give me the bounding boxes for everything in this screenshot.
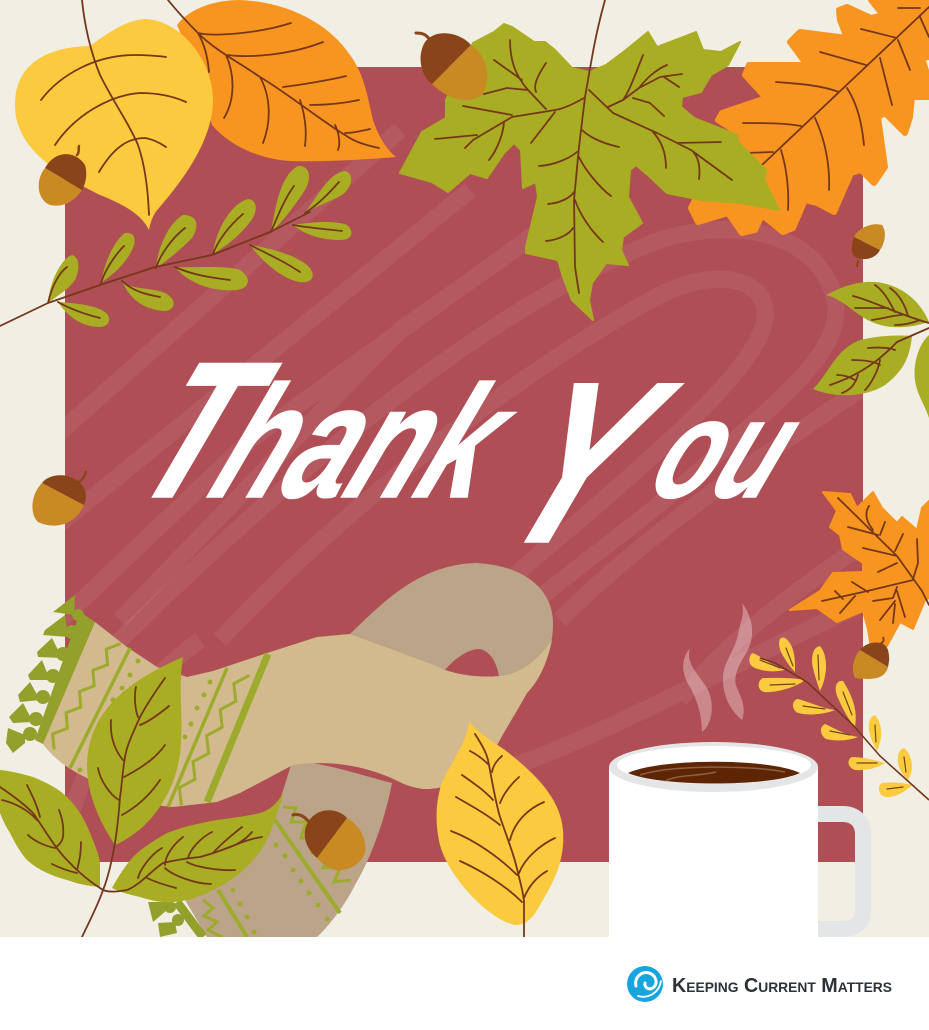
acorn top [416, 33, 487, 100]
oak leaf top right [691, 0, 929, 233]
tail pattern [218, 820, 340, 937]
logo wordmark: Keeping Current Matters [672, 975, 892, 997]
yellow branch right [749, 637, 929, 800]
branch left [0, 166, 351, 327]
left green leaf [0, 770, 103, 890]
title: T [108, 322, 300, 539]
scarf stripes [35, 612, 95, 744]
logo icon [627, 966, 663, 1002]
acorn right lower [853, 637, 889, 679]
scarf fringe [6, 595, 184, 937]
title: hank [189, 353, 543, 532]
coffee [628, 762, 800, 784]
red panel [40, 67, 870, 862]
coffee mug [609, 742, 863, 937]
title [85, 322, 846, 592]
scarf back loop [350, 563, 553, 700]
scarf [6, 563, 553, 937]
acorn right upper [852, 224, 885, 267]
acorn left middle [32, 472, 86, 526]
green maple leaf [400, 0, 779, 320]
right green leaves [813, 282, 929, 418]
white footer [0, 937, 929, 1030]
scarf lower tail [185, 762, 392, 937]
scarf hole [445, 649, 499, 677]
acorn left upper [39, 146, 86, 206]
steam [683, 603, 752, 732]
yellow heart leaf [15, 0, 213, 230]
yellow leaf bottom [437, 721, 563, 937]
center green leaf [82, 657, 183, 937]
acorn scarf [293, 810, 365, 870]
title: ou [631, 372, 824, 527]
orange maple leaf right [790, 492, 929, 654]
title: Y [468, 335, 706, 592]
scarf front band [42, 622, 552, 807]
mug handle [818, 814, 863, 929]
orange leaf top [168, 0, 396, 161]
right green leaf [103, 793, 283, 902]
